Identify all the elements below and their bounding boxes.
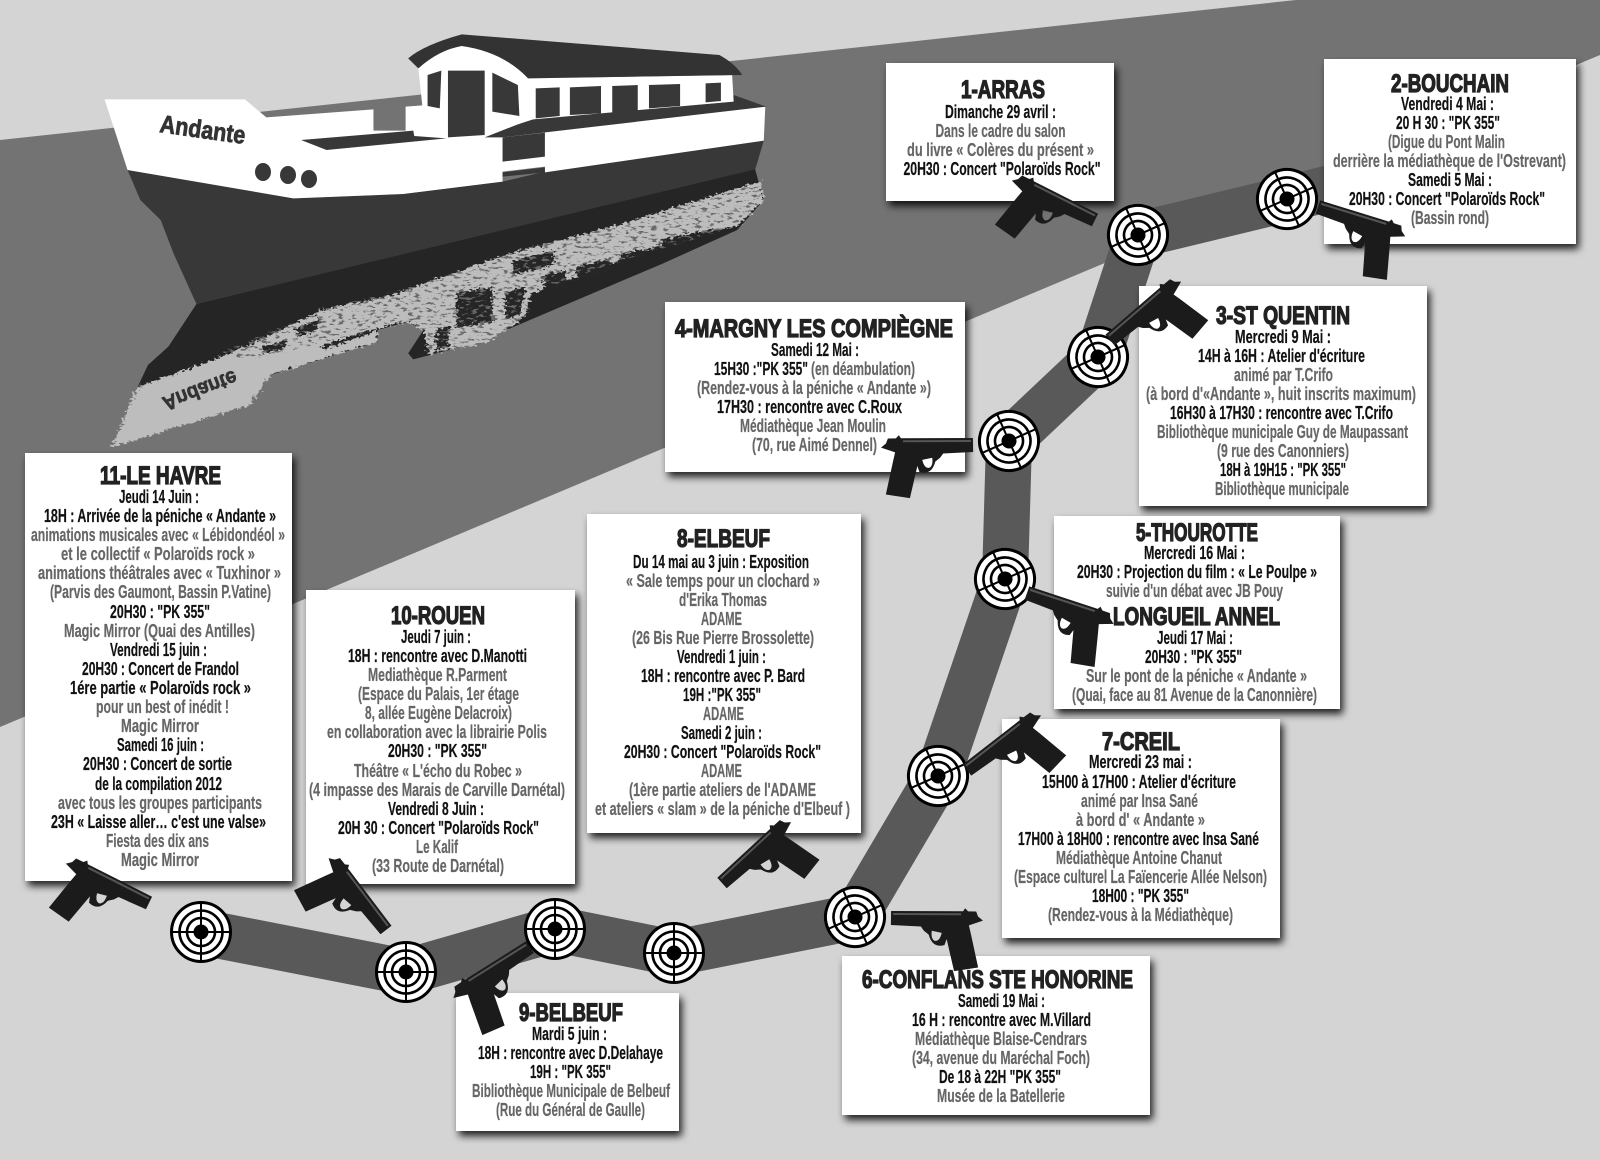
details: Le Havre: Jeudi 14 Juin : [119, 487, 199, 507]
icon: target stop 9 [525, 899, 585, 959]
details: Le Havre: avec tous les groupes participants [58, 793, 262, 813]
heading: 11-Le Havre: 11-LE HAVRE [100, 462, 221, 490]
details: Elbeuf: (1ère partie ateliers de l'ADAME [629, 780, 816, 800]
details: Longueil Annel: Jeudi 17 Mai : [1157, 628, 1233, 648]
heading: 2-Bouchain: 2-BOUCHAIN [1391, 70, 1509, 98]
icon: target stop 5 [965, 539, 1045, 619]
details: Creil [1014, 752, 1267, 925]
details: Le Havre: 18H : Arrivée de la péniche « Andante » [44, 506, 276, 526]
details: Rouen: (4 impasse des Marais de Carville Darnétal) [309, 780, 565, 800]
details: Conflans: De 18 à 22H "PK 355" [939, 1067, 1061, 1087]
diagonal dark band background [0, 0, 1600, 727]
details: Arras [904, 102, 1100, 179]
details: Arras: Dans le cadre du salon [936, 121, 1066, 141]
details: Le Havre: Magic Mirror (Quai des Antilles) [64, 621, 255, 641]
details: Arras: Dimanche 29 avril : [945, 102, 1056, 122]
details: Conflans [912, 991, 1091, 1106]
icon: pistol Arras [990, 170, 1100, 267]
details: Le Havre: et le collectif « Polaroïds rock » [61, 544, 255, 564]
heading: 3-St Quentin: 3-ST QUENTIN [1216, 302, 1350, 330]
details: St Quentin: animé par T.Crifo [1234, 365, 1333, 385]
panel: 11-Le Havre [25, 453, 292, 881]
icon: target stop 7 [815, 877, 895, 957]
details: Rouen: Vendredi 8 Juin : [388, 799, 484, 819]
details: Elbeuf: « Sale temps pour un clochard » [626, 571, 820, 591]
details: Belbeuf: Bibliothèque Municipale de Belbeuf [472, 1081, 671, 1101]
details: Elbeuf: Vendredi 1 juin : [677, 647, 766, 667]
details: Thourotte [1077, 543, 1317, 601]
details: Arras: du livre « Colères du présent » [907, 140, 1094, 160]
icon: pistol St Quentin [1103, 272, 1214, 380]
details: Le Havre [31, 487, 285, 870]
details: Belbeuf: (Rue du Général de Gaulle) [496, 1100, 645, 1120]
details: Longueil Annel: Sur le pont de la péniche « Andante » [1086, 666, 1307, 686]
heading: 6-Conflans Ste Honorine: 6-CONFLANS STE HONORINE [862, 966, 1133, 994]
panel: 1-Arras [886, 63, 1114, 201]
details: Margny: Samedi 12 Mai : [771, 340, 859, 360]
panel: 5-Thourotte / Longueil Annel [1054, 516, 1340, 709]
details: Le Havre: animations théâtrales avec « Tuxhinor » [38, 563, 281, 583]
details: Conflans: Médiathèque Blaise-Cendrars [915, 1029, 1087, 1049]
details: Conflans: Samedi 19 Mai : [958, 991, 1045, 1011]
details: Rouen: (Espace du Palais, 1er étage [358, 684, 519, 704]
details: Elbeuf: et ateliers « slam » de la péniche d'Elbeuf ) [595, 799, 850, 819]
icon: target stop 8 [644, 923, 704, 983]
details: Le Havre: (Parvis des Gaumont, Bassin P.Vatine) [50, 582, 271, 602]
details: Le Havre: 20H30 : Concert de Frandol [82, 659, 239, 679]
details: Rouen: 20H 30 : Concert "Polaroïds Rock" [338, 818, 539, 838]
details: Le Havre: Vendredi 15 juin : [110, 640, 207, 660]
details: Longueil Annel: (Quai, face au 81 Avenue de la Canonnière) [1072, 685, 1317, 705]
icon: pistol Elbeuf [715, 813, 825, 922]
details: Le Havre: pour un best of inédit ! [96, 697, 229, 717]
details: Creil: animé par Insa Sané [1081, 791, 1198, 811]
panel: 7-Creil [1002, 719, 1280, 938]
details: Belbeuf: 19H : "PK 355" [530, 1062, 611, 1082]
details: Elbeuf: 20H30 : Concert "Polaroïds Rock" [624, 742, 821, 762]
details: Margny [697, 340, 931, 455]
icon: pistol Conflans [890, 907, 983, 972]
details: Le Havre: Samedi 16 juin : [117, 735, 204, 755]
heading: Longueil Annel: LONGUEIL ANNEL [1113, 603, 1280, 631]
details: St Quentin: 18H à 19H15 : "PK 355" [1220, 460, 1346, 480]
panel: 8-Elbeuf [587, 514, 861, 833]
details: Le Havre: Magic Mirror [121, 850, 199, 870]
heading: 7-Creil: 7-CREIL [1102, 728, 1180, 756]
details: Elbeuf: (26 Bis Rue Pierre Brossolette) [632, 628, 814, 648]
icon: target stop 11 [171, 902, 231, 962]
details: Margny: Médiathèque Jean Moulin [740, 416, 886, 436]
icon: target stop 3 [1058, 317, 1138, 397]
icon: target stop 2 [1247, 159, 1327, 239]
details: Elbeuf: 18H : rencontre avec P. Bard [641, 666, 805, 686]
details: Conflans: 16 H : rencontre avec M.Villard [912, 1010, 1091, 1030]
details: Elbeuf: ADAME [703, 704, 744, 724]
details: Thourotte: Mercredi 16 Mai : [1144, 543, 1245, 563]
icon: pistol Belbeuf [447, 938, 558, 1041]
icon: target stop 6 [898, 736, 978, 816]
barge name: Andante [158, 110, 247, 150]
details: Rouen: Théâtre « L'écho du Robec » [354, 761, 522, 781]
details: Elbeuf: ADAME [701, 761, 742, 781]
details: Belbeuf: 18H : rencontre avec D.Delahaye [478, 1043, 663, 1063]
details: Longueil Annel: 20H30 : "PK 355" [1145, 647, 1242, 667]
details: St Quentin [1146, 327, 1416, 499]
panel: 3-St Quentin [1139, 286, 1427, 506]
details: Elbeuf: Du 14 mai au 3 juin : Exposition [633, 552, 809, 572]
icon: pistol Le Havre [44, 853, 154, 950]
heading: 4-Margny les Compiègne: 4-MARGNY LES COMPIÈGNE [675, 314, 953, 343]
icon: target stop 4 [969, 401, 1049, 481]
details: Le Havre: 20H30 : Concert de sortie [83, 754, 232, 774]
details: Le Havre: animations musicales avec « Lébidondéol » [31, 525, 285, 545]
details: Rouen: Jeudi 7 juin : [401, 627, 471, 647]
details: Bouchain: (Digue du Pont Malin [1388, 132, 1505, 152]
details: Rouen: Le Kalif [416, 837, 459, 857]
details: St Quentin: Mercredi 9 Mai : [1235, 327, 1331, 347]
icon: pistol Thourotte [1010, 583, 1118, 672]
details: Belbeuf: Mardi 5 juin : [532, 1024, 607, 1044]
details: Creil: 15H00 à 17H00 : Atelier d'écriture [1042, 772, 1236, 792]
details: Le Havre: de la compilation 2012 [95, 774, 222, 794]
details: Margny: (70, rue Aimé Dennel) [752, 435, 877, 455]
details: Bouchain [1333, 94, 1566, 228]
details: Longueil Annel [1072, 628, 1317, 705]
details: Le Havre: 20H30 : "PK 355" [110, 602, 210, 622]
panel: 6-Conflans Ste Honorine [842, 956, 1150, 1115]
barge reflection [111, 169, 764, 447]
icon: target stop 10 [376, 942, 436, 1002]
icon: pistol Bouchain [1302, 197, 1409, 285]
details: Creil: (Rendez-vous à la Médiathèque) [1048, 905, 1233, 925]
route path [201, 183, 1350, 972]
details: Le Havre: 23H « Laisse aller… c'est une valse» [51, 812, 266, 832]
panel: 4-Margny les Compiègne [665, 302, 965, 472]
panel: 2-Bouchain [1324, 59, 1576, 244]
details: Margny: 17H30 : rencontre avec C.Roux [717, 397, 902, 417]
details: Le Havre: Fiesta des dix ans [106, 831, 209, 851]
details: St Quentin: 16H30 à 17H30 : rencontre avec T.Crifo [1170, 403, 1393, 423]
illustration: barge Andante [105, 34, 766, 447]
details: Belbeuf [472, 1024, 671, 1120]
details: Creil: à bord d' « Andante » [1076, 810, 1205, 830]
details: St Quentin: Bibliothèque municipale Guy de Maupassant [1157, 422, 1408, 442]
reflected barge name: Andante [159, 365, 240, 415]
heading: 10-Rouen: 10-ROUEN [391, 602, 485, 630]
details: Elbeuf: 19H :"PK 355" [683, 685, 761, 705]
details: Rouen: Mediathèque R.Parment [368, 665, 507, 685]
details: Margny: (en déambulation) [811, 359, 915, 379]
portholes [255, 163, 317, 188]
details: Arras: 20H30 : Concert "Polaroïds Rock" [904, 159, 1100, 179]
details: Rouen: en collaboration avec la librairie Polis [327, 722, 547, 742]
details: Creil: 18H00 : "PK 355" [1092, 886, 1189, 906]
details: Bouchain: Vendredi 4 Mai : [1401, 94, 1494, 114]
barge hull and cabin [105, 34, 766, 304]
icon: pistol Margny [881, 434, 974, 499]
icon: target stop 1 [1098, 195, 1178, 275]
details: Creil: (Espace culturel La Faïencerie Allée Nelson) [1014, 867, 1267, 887]
details: Creil: Médiathèque Antoine Chanut [1056, 848, 1222, 868]
details: Rouen: 18H : rencontre avec D.Manotti [348, 646, 527, 666]
panel: 10-Rouen [306, 590, 575, 884]
details: Rouen [309, 627, 565, 876]
details: Bouchain: (Bassin rond) [1411, 208, 1489, 228]
panel: 9-Belbeuf [456, 993, 679, 1131]
details: Le Havre: 1ére partie « Polaroïds rock » [70, 678, 251, 698]
details: St Quentin: (9 rue des Canonniers) [1217, 441, 1349, 461]
details: Thourotte: suivie d'un débat avec JB Pouy [1106, 581, 1283, 601]
details: Creil: Mercredi 23 mai : [1089, 752, 1192, 772]
details: Margny: (Rendez-vous à la péniche « Andante ») [697, 378, 931, 398]
heading: 1-Arras: 1-ARRAS [961, 76, 1045, 104]
details: Margny: 15H30 :"PK 355" [714, 359, 808, 379]
details: Rouen: 20H30 : "PK 355" [388, 741, 487, 761]
details: Rouen: 8, allée Eugène Delacroix) [365, 703, 512, 723]
details: Le Havre: Magic Mirror [121, 716, 199, 736]
details: Conflans: (34, avenue du Maréchal Foch) [912, 1048, 1090, 1068]
details: Elbeuf: ADAME [701, 609, 742, 629]
details: Bouchain: 20 H 30 : "PK 355" [1396, 113, 1500, 133]
details: Conflans: Musée de la Batellerie [937, 1086, 1065, 1106]
details: Creil: 17H00 à 18H00 : rencontre avec Insa Sané [1018, 829, 1259, 849]
heading: 9-Belbeuf: 9-BELBEUF [519, 999, 623, 1027]
details: Thourotte: 20H30 : Projection du film : « Le Poulpe » [1077, 562, 1317, 582]
details: Elbeuf [595, 552, 850, 819]
details: St Quentin: 14H à 16H : Atelier d'écriture [1198, 346, 1365, 366]
icon: pistol Creil [960, 706, 1072, 812]
details: Bouchain: Samedi 5 Mai : [1408, 170, 1492, 190]
heading: 5-Thourotte: 5-THOUROTTE [1136, 519, 1258, 547]
heading: 8-Elbeuf: 8-ELBEUF [677, 525, 770, 553]
details: St Quentin: (à bord d'«Andante », huit inscrits maximum) [1146, 384, 1416, 404]
details: Elbeuf: d'Erika Thomas [679, 590, 767, 610]
icon: pistol Rouen [288, 851, 395, 962]
details: Rouen: (33 Route de Darnétal) [372, 856, 504, 876]
details: Elbeuf: Samedi 2 juin : [681, 723, 762, 743]
details: St Quentin: Bibliothèque municipale [1215, 479, 1349, 499]
